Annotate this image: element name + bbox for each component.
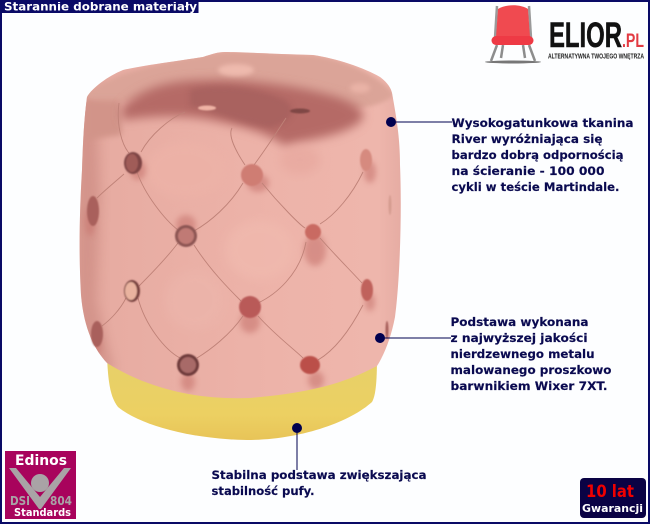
logo: Elior.pl [485,5,644,64]
shoulder [85,100,122,140]
callout text [450,315,612,393]
callout text: Wysokogatunkowa tkanina [452,116,634,130]
callout text [452,116,634,194]
callout text: Podstawa wykonana [450,315,588,329]
callout text: River wyróżniająca się [452,132,603,146]
badge: Edinos DSI 804 Standards: Standards [14,506,71,519]
leader line and dot [375,333,451,343]
light panel between buttons [289,154,313,167]
top highlight [218,64,254,76]
callout text: barwnikiem Wixer 7XT. [450,379,608,393]
badge: Edinos DSI 804 Standards: 804 [50,494,72,508]
callout text [212,468,426,498]
callout: stability [212,423,426,498]
icon: red chair [485,5,541,64]
velvet shading, clipped to seat [78,51,394,391]
callout text: Stabilna podstawa zwiększająca [212,468,426,482]
tufting buttons [87,149,392,376]
leader line and dot [386,117,452,127]
pouf product photo [78,51,401,440]
velvet tufted seat [80,52,401,398]
gold metal base [107,355,377,440]
top of seat [85,51,394,109]
badge: 10 years warranty: Gwarancji [582,502,643,515]
left edge shade [78,100,115,370]
callout text: stabilność pufy. [212,484,314,498]
callout text: na ścieranie - 100 000 [452,164,604,178]
seam lines [97,103,363,360]
callout: fabric [386,116,634,194]
callout text: z najwyższej jakości [450,331,588,345]
badge: 10 years warranty: 10 lat [586,482,634,502]
callout text: cykli w teście Martindale. [452,180,620,194]
callout text: bardzo dobrą odpornością [452,148,624,162]
callout text: malowanego proszkowo [450,363,612,377]
callout text: nierdzewnego metalu [450,347,594,361]
leader line and dot [292,423,302,470]
badge: Edinos DSI 804 Standards [5,451,76,519]
badge: Edinos DSI 804 Standards: Edinos [15,453,67,469]
badge: Edinos DSI 804 Standards: DSI [10,494,30,508]
shaded crease band [122,80,363,146]
callout: metal base [375,315,612,393]
button shadows [85,160,376,391]
badge: 10 years warranty [580,478,646,518]
